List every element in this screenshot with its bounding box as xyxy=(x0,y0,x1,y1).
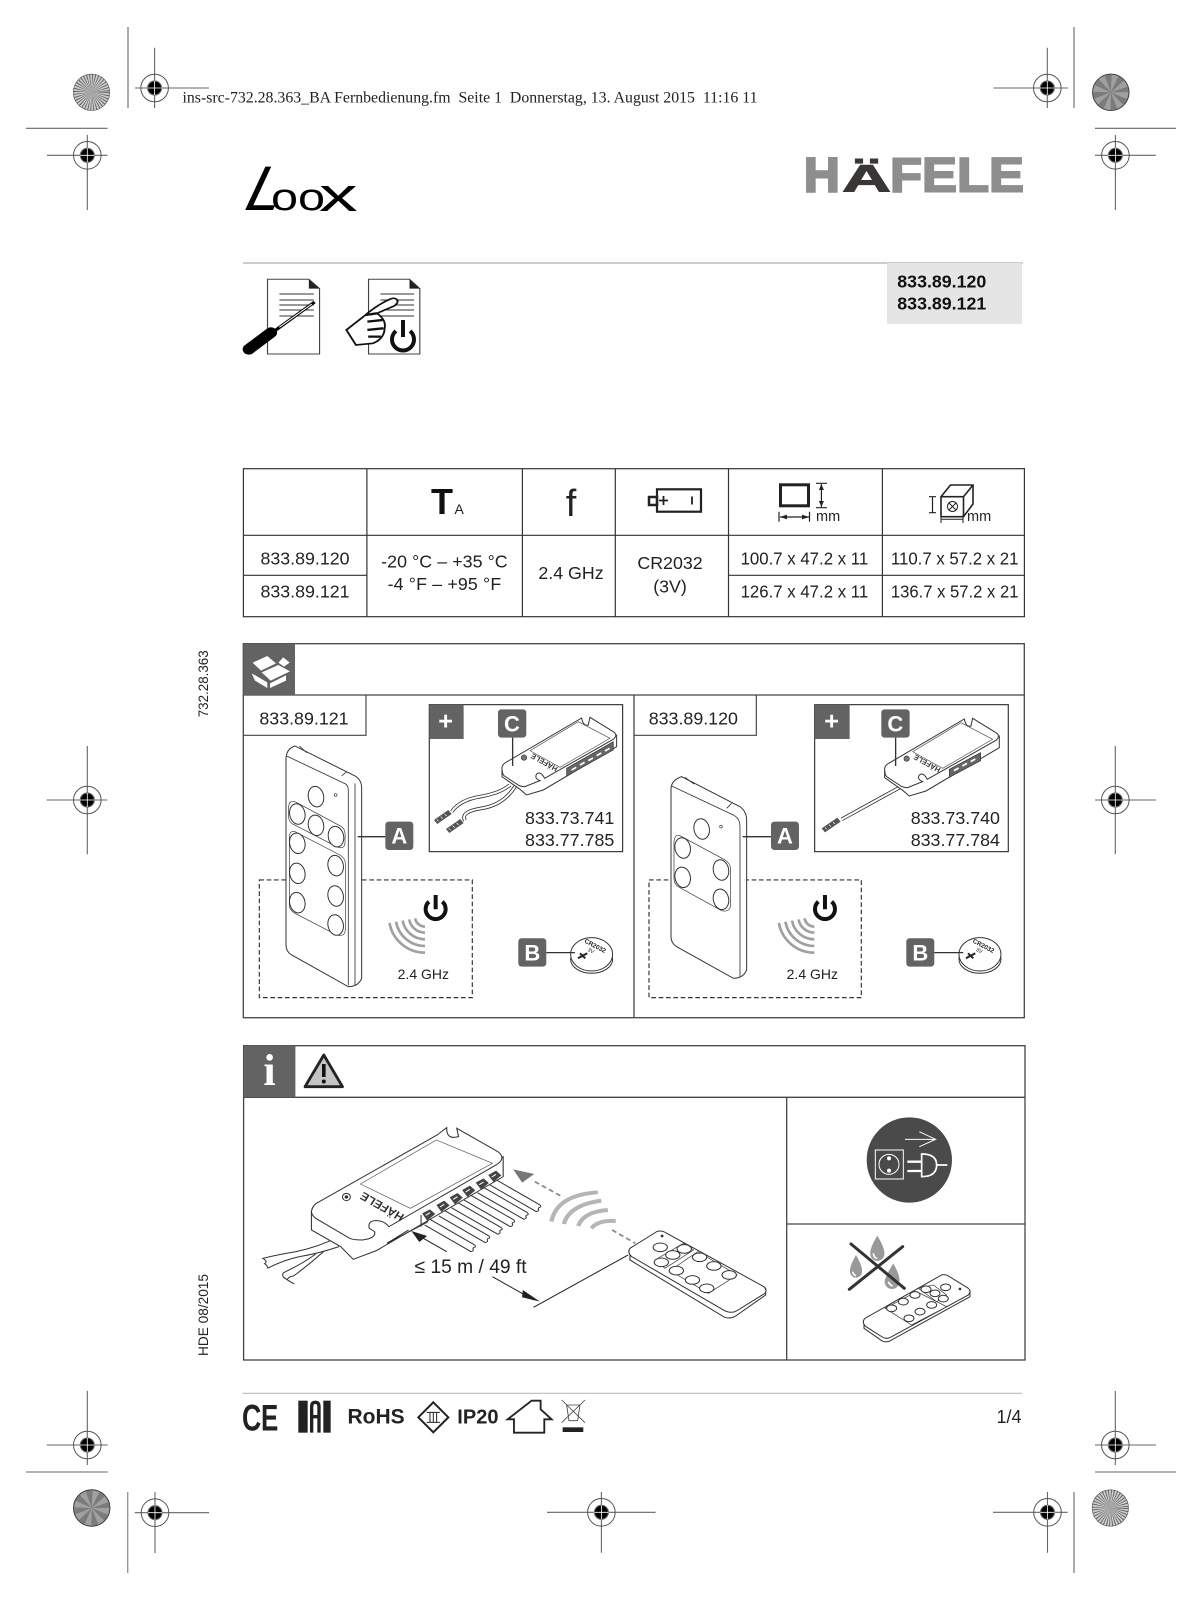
registration mark bottom left A xyxy=(47,1391,108,1465)
article number box: 833.89.121 xyxy=(897,293,986,313)
icon: installation manual with screwdriver xyxy=(249,279,320,354)
label B with coin cell: CR2032 xyxy=(971,938,996,955)
table grid xyxy=(243,469,1024,617)
EAC mark xyxy=(298,1401,331,1433)
table data: model numbers: 833.89.120 xyxy=(260,549,350,569)
accessory box: + xyxy=(824,708,839,736)
panel frame xyxy=(244,1046,1025,1360)
label B with coin cell: B xyxy=(912,940,928,965)
header: product dimensions icon xyxy=(779,483,840,525)
label C: C xyxy=(504,712,520,737)
input cable xyxy=(263,1237,339,1284)
registration mark bottom right B xyxy=(1095,1391,1156,1465)
header: housing dimensions icon: mm xyxy=(967,509,991,525)
range label: ≤ 15 m / 49 ft xyxy=(415,1256,527,1278)
article number box: 833.89.120 xyxy=(897,271,986,291)
label C xyxy=(881,709,910,766)
label A: A xyxy=(777,824,793,849)
model tab xyxy=(243,695,366,735)
crop mark: top right horizontal xyxy=(1095,127,1176,129)
header: housing dimensions icon xyxy=(929,485,991,525)
crop mark: bottom left vertical xyxy=(127,1492,129,1573)
CE mark: E xyxy=(261,1397,278,1439)
accessory article numbers xyxy=(525,808,614,850)
page number: 1/4 xyxy=(996,1407,1022,1427)
wired controller: HÄFELE xyxy=(529,751,559,773)
model tab: 833.89.121 xyxy=(259,708,349,728)
table data: temperature xyxy=(381,552,508,594)
colour target: bottom left moire xyxy=(73,1490,110,1526)
remote with five buttons xyxy=(671,777,747,978)
output wires xyxy=(425,1178,541,1252)
table data: battery type: CR2032 xyxy=(637,553,703,573)
label B with coin cell: B xyxy=(524,940,540,965)
crop mark: top right vertical xyxy=(1073,27,1075,108)
crop mark: top left horizontal xyxy=(26,127,108,129)
crop mark: top left vertical xyxy=(127,27,129,108)
print slug line: ins-src-732.28.363_BA Fernbedienung.fm Seite 1 Donnerstag, 13. August 2015 11:16 11 xyxy=(182,90,758,107)
protection class III diamond xyxy=(418,1402,448,1432)
controller body: HÄFELE xyxy=(358,1189,407,1223)
Häfele logo: FELE xyxy=(890,150,1024,203)
frequency label: 2.4 GHz xyxy=(787,966,838,982)
label B with coin cell xyxy=(518,938,613,973)
CE mark: C xyxy=(242,1397,261,1439)
icon: warning triangle xyxy=(305,1055,342,1087)
illustration: controller, range and remote xyxy=(263,1128,766,1318)
CE mark xyxy=(242,1397,278,1439)
accessory article numbers: 833.73.741 xyxy=(525,808,614,828)
icon: WEEE bin xyxy=(562,1400,585,1432)
Häfele logo: H xyxy=(804,149,840,203)
table data: product dimensions: 126.7 x 47.2 x 11 xyxy=(741,582,868,602)
registration mark middle left xyxy=(47,746,107,854)
model tab xyxy=(634,695,756,735)
label A: A xyxy=(391,824,407,849)
header: ambient temperature xyxy=(431,481,464,522)
footer divider xyxy=(243,1392,1022,1394)
header: ambient temperature: A xyxy=(454,501,464,517)
panel frame xyxy=(243,644,1024,1018)
remote xyxy=(863,1275,970,1342)
Häfele logo xyxy=(804,149,1024,203)
label B with coin cell: 3V xyxy=(975,947,984,956)
remote xyxy=(629,1231,766,1318)
icon: radio waves xyxy=(390,918,425,953)
table data: housing dimensions: 136.7 x 57.2 x 21 xyxy=(891,582,1019,602)
crop mark: bottom left horizontal xyxy=(26,1471,108,1473)
header: product dimensions icon: mm xyxy=(816,509,840,525)
remote with ten buttons xyxy=(286,746,362,987)
table data: battery type: (3V) xyxy=(653,576,687,596)
radio waves xyxy=(551,1192,616,1228)
side text: date code: HDE 08/2015 xyxy=(196,1274,211,1356)
accessory box xyxy=(815,705,1008,852)
icon: power symbol xyxy=(426,895,446,919)
icon: radio waves xyxy=(779,918,814,953)
header divider xyxy=(243,262,1023,264)
cross xyxy=(849,1244,904,1289)
label B with coin cell: CR2032 xyxy=(583,938,607,955)
icon: open box xyxy=(243,644,295,695)
wired controller xyxy=(822,718,999,832)
article number box xyxy=(887,263,1022,324)
label B with coin cell: 3V xyxy=(586,947,595,956)
crop mark: bottom right vertical xyxy=(1073,1492,1075,1573)
table data: model numbers xyxy=(260,549,350,602)
specification table xyxy=(243,469,1024,617)
icon: operating manual with hand and power symbol xyxy=(346,279,420,354)
accessory article numbers xyxy=(911,808,1000,850)
Loox logo xyxy=(233,154,358,224)
accessory box xyxy=(429,705,623,852)
Loox logo: L xyxy=(233,154,301,224)
controller body xyxy=(311,1128,503,1259)
colour target: top left sunburst xyxy=(73,74,110,111)
wired controller: HÄFELE xyxy=(912,752,942,774)
accessory article numbers: 833.77.785 xyxy=(525,830,614,850)
colour target: top right moire xyxy=(1092,74,1129,111)
sub-panel: model 833.89.121 xyxy=(243,695,623,998)
registration mark bottom centre xyxy=(547,1492,656,1553)
registration mark top right B xyxy=(1095,135,1156,210)
registration mark bottom right A xyxy=(993,1492,1068,1553)
table data: temperature: -20 °C – +35 °C xyxy=(381,552,508,572)
Häfele logo: Ä xyxy=(842,157,891,200)
Loox logo: o xyxy=(298,177,325,219)
info badge: i xyxy=(263,1046,276,1095)
accessory article numbers: 833.73.740 xyxy=(911,808,1000,828)
table data: housing dimensions: 110.7 x 57.2 x 21 xyxy=(891,549,1019,569)
icon: keep remote away from water xyxy=(849,1236,970,1342)
crop mark: bottom right horizontal xyxy=(1095,1471,1176,1473)
dashed box xyxy=(259,880,472,998)
header: ambient temperature: T xyxy=(431,481,453,522)
icon: power symbol xyxy=(815,895,835,919)
registration mark middle right xyxy=(1095,746,1156,854)
table data: model numbers: 833.89.121 xyxy=(260,582,350,602)
RoHS mark: RoHS xyxy=(348,1405,405,1428)
icon: indoor use house xyxy=(508,1401,552,1433)
signal arrow xyxy=(513,1169,635,1243)
info badge xyxy=(244,1046,295,1097)
header: frequency: f xyxy=(566,483,577,525)
label C: C xyxy=(887,712,903,737)
dashed box xyxy=(649,880,861,998)
registration mark top left A xyxy=(135,48,209,108)
table data: temperature: -4 °F – +95 °F xyxy=(388,574,501,594)
table data: product dimensions xyxy=(741,549,868,602)
registration mark top right A xyxy=(994,48,1068,108)
table data: frequency: 2.4 GHz xyxy=(538,563,604,583)
accessory box: + xyxy=(438,708,453,736)
side text: document number: 732.28.363 xyxy=(196,650,211,717)
panel: safety information xyxy=(244,1046,1025,1360)
label A xyxy=(358,822,413,850)
model tab: 833.89.120 xyxy=(649,708,738,728)
panel: scope of delivery xyxy=(243,644,1024,1018)
registration mark bottom left B xyxy=(135,1492,209,1553)
registration mark top left B xyxy=(47,135,108,210)
wired controller xyxy=(434,717,617,833)
accessory article numbers: 833.77.784 xyxy=(911,830,1000,850)
label B with coin cell xyxy=(906,938,1001,973)
sub-panel: model 833.89.120 xyxy=(634,695,1008,998)
Loox logo: x xyxy=(319,169,358,221)
colour target: bottom right sunburst xyxy=(1092,1490,1129,1526)
header: battery icon xyxy=(649,489,701,512)
IP20 mark: IP20 xyxy=(457,1406,498,1428)
Loox logo: o xyxy=(271,177,298,219)
label C xyxy=(498,709,526,766)
table data: battery type xyxy=(637,553,703,596)
range dimension arrows xyxy=(387,1230,628,1307)
label A xyxy=(743,822,799,850)
water drops xyxy=(850,1236,900,1289)
certification symbols xyxy=(242,1397,585,1439)
table data: housing dimensions xyxy=(891,549,1019,602)
icon: unplug before servicing xyxy=(867,1117,952,1203)
table data: product dimensions: 100.7 x 47.2 x 11 xyxy=(741,549,868,569)
frequency label: 2.4 GHz xyxy=(398,966,449,982)
